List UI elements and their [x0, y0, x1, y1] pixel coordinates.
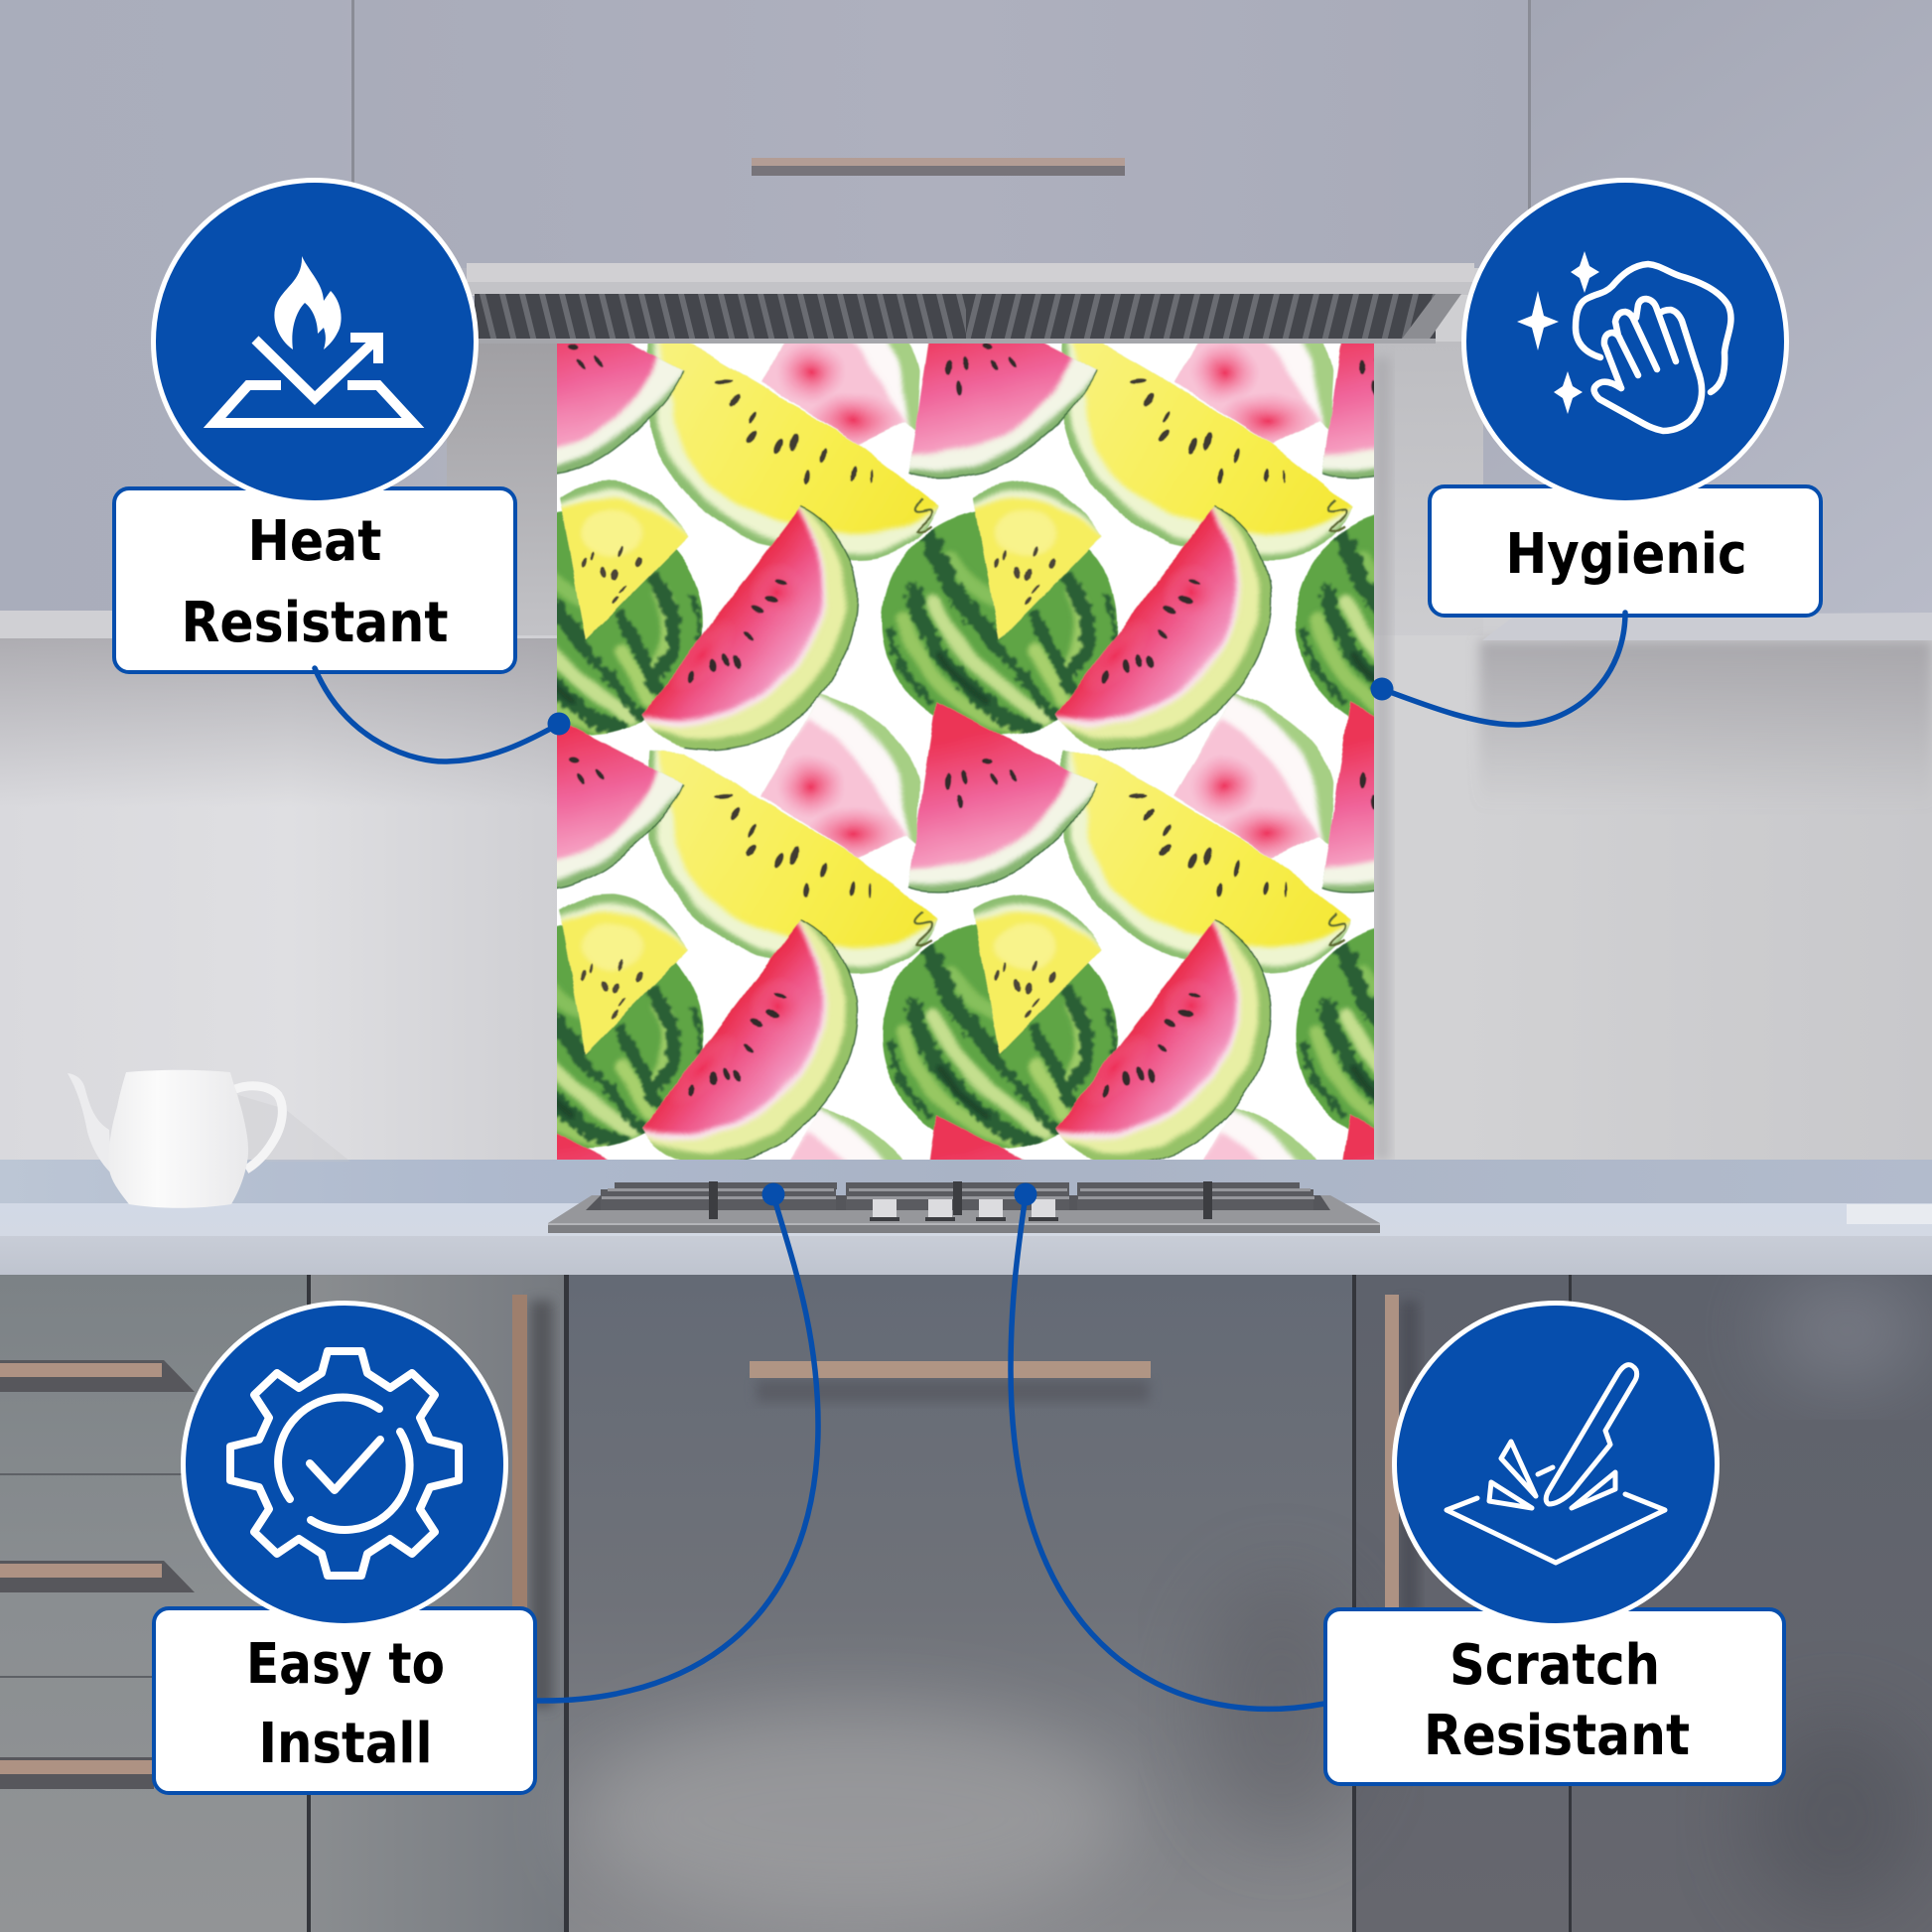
label text: Easy to Install: Easy to: [246, 1632, 445, 1697]
range hood: [467, 263, 1474, 344]
icon circle: Easy to Install: [183, 1303, 506, 1626]
label box: Heat Resistant: [114, 488, 515, 672]
panel: watermelon pattern splashback: [557, 344, 1374, 1160]
white teapot: [68, 1070, 350, 1208]
icon: gear with check mark: [230, 1351, 459, 1576]
shadow under right cabinet: [1479, 640, 1932, 809]
label text: Scratch Resistant: [1424, 1633, 1690, 1768]
connector: Scratch Resistant to hob: [1011, 1183, 1324, 1709]
icon: flame on surface with arrow: [214, 256, 413, 423]
label text: Scratch Resistant: Resistant: [1424, 1704, 1690, 1768]
connector: Heat Resistant to panel: [315, 668, 570, 761]
lower cabinets: [0, 1275, 1932, 1932]
label text: Hygienic: Hygienic: [1505, 522, 1747, 587]
wall beside panel, right: [1374, 342, 1483, 641]
icon circle: Hygienic: [1463, 181, 1787, 502]
label text: Heat Resistant: Heat: [248, 509, 381, 574]
panel shadow: [1374, 357, 1390, 1162]
icon circle: Heat Resistant: [153, 181, 477, 502]
callout: Scratch Resistant: [1325, 1303, 1784, 1784]
label box: Scratch Resistant: [1325, 1609, 1784, 1784]
callout: Easy to Install: [154, 1303, 535, 1793]
drawer handles: [0, 1360, 195, 1789]
shadow under left cabinet: [0, 638, 557, 807]
label text: Scratch Resistant: Scratch: [1449, 1633, 1660, 1698]
gas hob: [548, 1181, 1380, 1233]
cabinet handle: [752, 158, 1125, 176]
label box: Hygienic: [1430, 486, 1821, 616]
icon: hand wiping with sparkles: [1517, 251, 1730, 431]
countertop surface: [0, 1203, 1932, 1237]
countertop front edge: [0, 1236, 1932, 1275]
countertop back: [0, 1160, 1932, 1205]
right cabinet lip: [1482, 613, 1932, 640]
label text: Heat Resistant: [181, 509, 449, 655]
label text: Easy to Install: [246, 1632, 445, 1776]
door handles: [512, 1295, 1419, 1708]
callout: Heat Resistant: [114, 181, 515, 672]
label text: Easy to Install: Install: [258, 1712, 433, 1776]
tiled wall: [0, 635, 1932, 1162]
left cabinet lip: [0, 611, 447, 638]
connector: Hygienic to panel: [1370, 613, 1625, 725]
icon: knife scratching surface: [1447, 1365, 1665, 1563]
label text: Heat Resistant: Resistant: [181, 591, 449, 655]
icon circle: Scratch Resistant: [1394, 1303, 1718, 1626]
label box: Easy to Install: [154, 1608, 535, 1793]
callout: Hygienic: [1430, 181, 1821, 616]
wall beside panel, left: [447, 342, 557, 639]
connector: Easy to Install to hob: [537, 1183, 818, 1701]
upper cabinet doors: [0, 0, 1932, 614]
